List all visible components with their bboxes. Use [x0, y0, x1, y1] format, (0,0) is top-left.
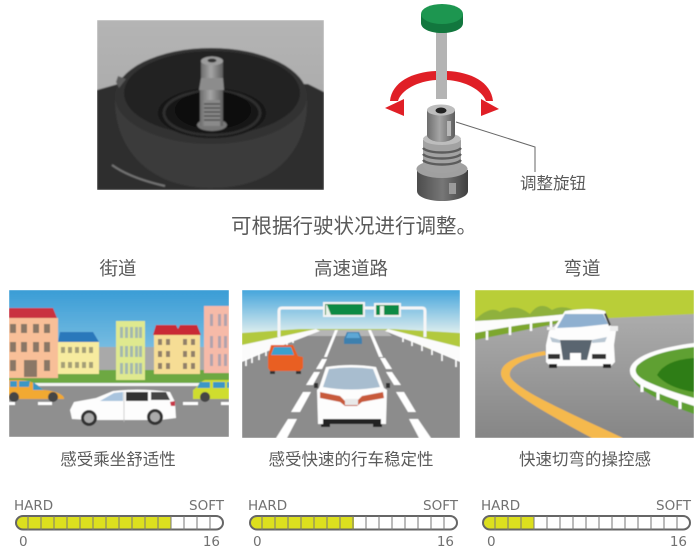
caption: street: 感受乘坐舒适性 [60, 450, 176, 469]
car: yellow-green [193, 380, 229, 402]
left guardrail [475, 314, 565, 340]
heading: street: 街道 [99, 258, 137, 279]
roadside grass and rail [630, 343, 694, 414]
gauge: expressway, 8 of 16 [248, 498, 459, 550]
gauge: curve, 4 of 16: HARD [481, 498, 520, 514]
gauge: curve, 4 of 16 [481, 498, 692, 550]
lane markings [276, 330, 431, 438]
gauge: curve, 4 of 16: SOFT [656, 498, 692, 514]
road surface [242, 330, 460, 438]
gauge: street, 12 of 16: 0 [19, 534, 28, 550]
car: white front view [546, 309, 618, 368]
main caption: 可根据行驶状况进行调整。 [231, 215, 477, 238]
left guardrail [242, 329, 320, 366]
tool green cap [421, 4, 463, 33]
rotation arrows [385, 71, 499, 116]
gauge: curve, 4 of 16: 16 [670, 534, 687, 550]
panel: expressway scene [242, 290, 460, 438]
leader line [456, 122, 535, 172]
road [475, 314, 694, 438]
gauge: street, 12 of 16 [14, 498, 225, 550]
photo: adjustment stud on strut mount [97, 20, 324, 190]
knob body [416, 104, 468, 201]
car: white lead car [314, 365, 390, 427]
sign gantry [279, 303, 425, 337]
right guardrail [385, 329, 460, 367]
gauge: street, 12 of 16: HARD [14, 498, 53, 514]
panel: curve scene [475, 290, 694, 438]
building: right pink [204, 306, 229, 373]
heading: curve: 弯道 [563, 258, 601, 279]
tool shaft [436, 30, 447, 99]
caption: expressway: 感受快速的行车稳定性 [268, 450, 434, 469]
gauge: street, 12 of 16: SOFT [189, 498, 225, 514]
heading: expressway: 高速道路 [314, 258, 388, 279]
gauge: curve, 4 of 16: 0 [487, 534, 496, 550]
building: red roof [153, 325, 201, 374]
car: blue distant [344, 332, 362, 344]
road [9, 383, 229, 437]
diagram: adjustment knob and tool [385, 4, 586, 201]
car: orange [268, 345, 303, 374]
gauge: expressway, 8 of 16: 0 [253, 534, 262, 550]
gauge: expressway, 8 of 16: SOFT [423, 498, 459, 514]
building: tall yellow-green [116, 321, 145, 380]
car: orange [9, 380, 64, 402]
gauge: expressway, 8 of 16: HARD [248, 498, 287, 514]
yellow centre line [501, 351, 623, 438]
gauge: expressway, 8 of 16: 16 [437, 534, 454, 550]
building: blue roof [58, 332, 99, 374]
gauge: street, 12 of 16: 16 [203, 534, 220, 550]
caption: curve: 快速切弯的操控感 [519, 450, 651, 469]
panel: street scene [9, 290, 229, 437]
car: white minivan [70, 390, 176, 426]
label: knob: 调整旋钮 [520, 174, 586, 193]
building: left orange [9, 308, 58, 378]
